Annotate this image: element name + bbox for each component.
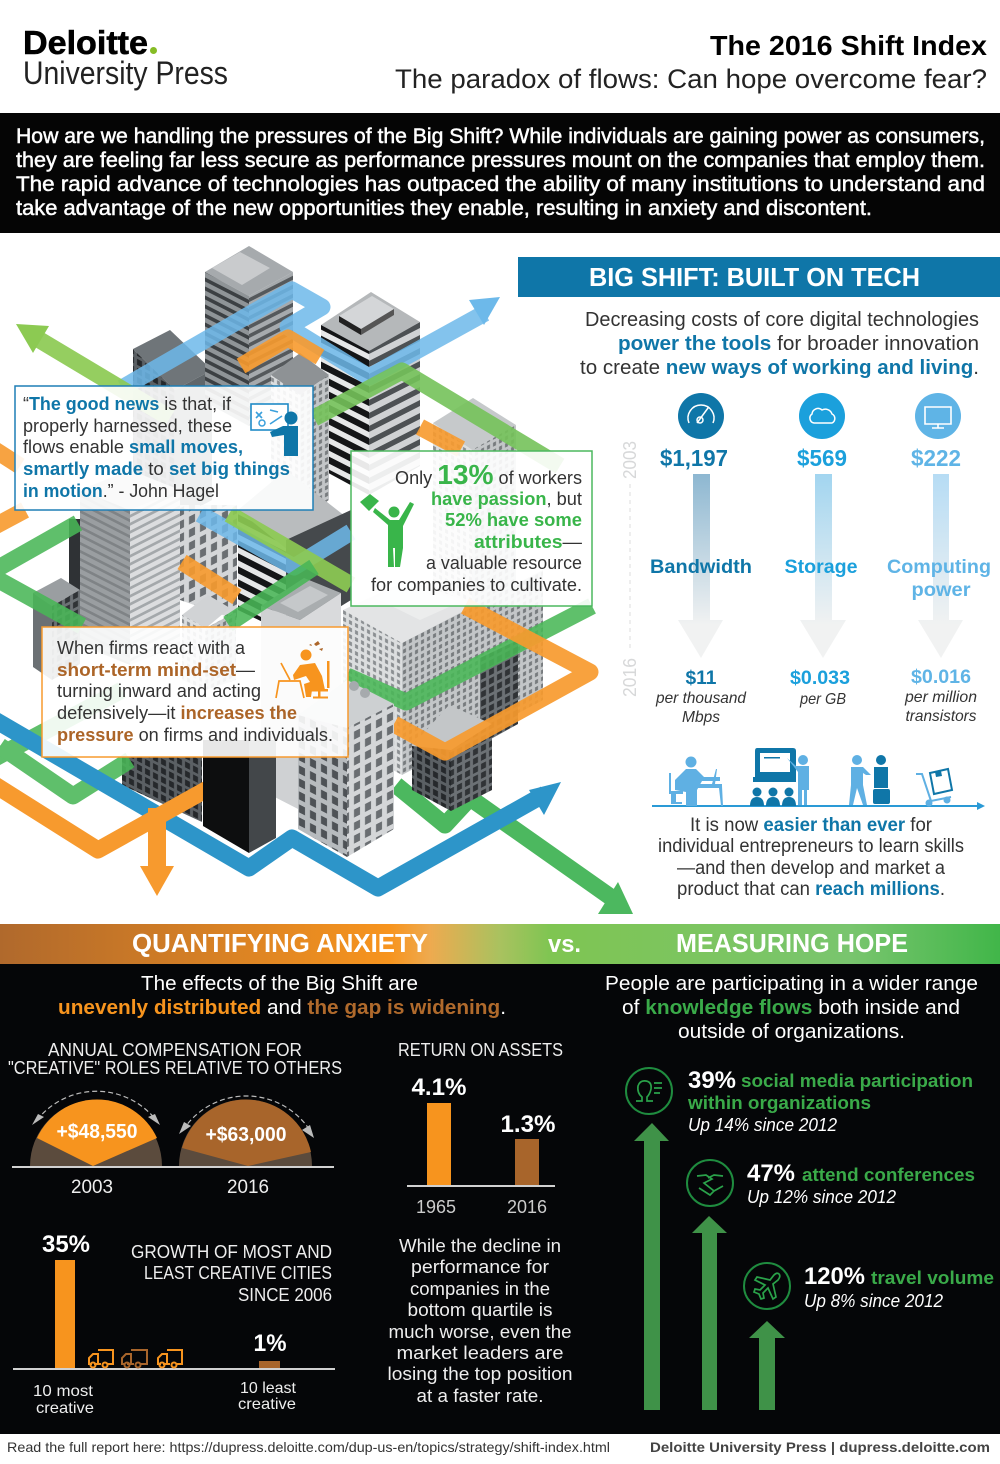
icon: cheering figure with box [360,494,414,567]
stat: social media participation: 39% [688,1067,736,1094]
text: decline in performance: losing the top position [388,1364,572,1384]
callout: John Hagel quote: properly harnessed, these [23,416,232,436]
callout: John Hagel quote: smartly made to set big things [23,459,290,479]
chart: growth of creative cities: SINCE 2006 [238,1285,332,1305]
chart: growth of creative cities: 10 least [240,1380,297,1397]
building: left small [33,578,80,680]
chart: return on assets [398,1040,563,1217]
intro text [580,309,979,379]
entrepreneur text: individual entrepreneurs to learn skills [658,836,964,857]
chart: annual compensation: ANNUAL COMPENSATION FOR [48,1040,302,1060]
anxiety intro text: unevenly distributed and the gap is widening . [58,997,506,1019]
stat: social media participation: social media participation [741,1071,973,1091]
hope intro text: People are participating in a wider range [605,973,978,995]
callout: John Hagel quote: in motion.” - John Hagel [23,481,219,501]
callout: short-term mind-set [42,627,348,757]
building: dark front right [412,705,492,811]
stat: attend conferences: Up 12% since 2012 [747,1187,896,1207]
section heading bar: QUANTIFYING ANXIETY [132,928,428,958]
arrowhead: blue bottom [529,782,561,815]
icons: delivery trucks [89,1350,182,1368]
flow: orange right [394,606,590,752]
intro text: Decreasing costs of core digital technologies [585,309,979,331]
column: bandwidth: Mbps [682,709,720,726]
title: The 2016 Shift Index [710,30,987,61]
stat: social media participation: within organizations [687,1093,871,1113]
arrowhead: top green [16,324,49,353]
callout: short-term mind-set: short-term mind-set — [57,660,255,680]
section heading bar [0,924,1000,964]
flow: top green [33,336,351,585]
text: decline in performance: bottom quartile is [408,1300,552,1320]
column: storage: $569 [797,445,847,471]
chart: return on assets: RETURN ON ASSETS [398,1040,563,1060]
stat: travel volume [744,1263,994,1410]
timeline labels [620,441,640,697]
chart: growth of creative cities: 35% [42,1231,90,1258]
callout: John Hagel quote: flows enable small moves, [23,437,243,457]
callout: short-term mind-set: defensively—it increases the [57,703,297,723]
column: computing power: $0.016 [911,667,971,688]
dark lower panel [0,964,1000,1434]
heading bar: BIG SHIFT: BUILT ON TECH [589,262,920,292]
column: storage: Storage [784,557,858,578]
timeline labels: 2016 [620,658,640,697]
column: computing power: transistors [906,708,976,725]
hope intro text: outside of organizations. [678,1021,905,1043]
text: decline in performance: performance for [411,1257,549,1277]
column: storage [784,393,858,708]
footer: Read the full report here: https://dupress.deloitte.com/dup-us-en/topics/strategy/shift-index.html [7,1439,610,1455]
chart: return on assets: 1965 [416,1197,456,1217]
callout: John Hagel quote: “The good news is that, if [23,394,232,414]
logo: Deloitte University Press: University Press [23,55,228,91]
stat: travel volume: Up 8% since 2012 [804,1291,943,1311]
flow: mid green [0,523,592,796]
icon: stressed worker at laptop [276,641,330,698]
stat: travel volume: travel volume [871,1268,994,1288]
building: left big stripes [69,470,180,665]
callout: workers' passion: 52% have some [445,510,582,530]
stat: social media participation [626,1067,973,1410]
building: central dark [238,470,351,640]
footer: Deloitte University Press | dupress.deloitte.com [650,1439,990,1455]
text: decline in performance: much worse, even the [388,1322,572,1342]
building: tall top [205,246,293,426]
stat: attend conferences: 47% [747,1160,795,1187]
stat: attend conferences [687,1160,975,1410]
flow: orange bottom [0,768,245,850]
chart: growth of creative cities: LEAST CREATIVE CITIES [144,1263,332,1283]
column: computing power: per million [904,689,977,706]
entrepreneur text: —and then develop and market a [677,858,945,879]
chart: growth of creative cities: creative [238,1396,296,1413]
chart: return on assets: 1.3% [500,1111,556,1138]
intro band [0,113,1000,233]
intro text: power the tools for broader innovation [618,333,979,355]
chart: annual compensation: 2003 [71,1177,113,1198]
column: computing power: power [912,580,971,601]
column: bandwidth [650,393,752,726]
column: storage: per GB [799,691,846,708]
text: decline in performance: market leaders are [396,1343,564,1363]
intro band: take advantage of the new opportunities they enable, resulting in anxiety and discontent. [16,197,872,220]
intro band: The rapid advance of technologies has outpaced the ability of many institutions to understand and [16,173,985,196]
building: large right block [343,570,543,775]
timeline labels: 2003 [620,441,640,479]
section heading bar: MEASURING HOPE [676,928,908,958]
chart: annual compensation: "CREATIVE" ROLES RELATIVE TO OTHERS [8,1058,342,1078]
chart: growth of creative cities [13,1231,335,1417]
text: decline in performance: While the decline in [399,1236,561,1256]
building: striped tower [321,292,420,495]
callout: workers' passion: attributes — [474,532,582,552]
text: decline in performance [388,1236,572,1406]
callout: short-term mind-set: pressure on firms and individuals. [57,725,333,745]
chart: annual compensation: +$48,550 [56,1121,138,1143]
callout: workers' passion: for companies to cultivate. [371,575,582,595]
callout: short-term mind-set: turning inward and acting [57,681,261,701]
logo: Deloitte University Press [23,24,228,91]
column: bandwidth: $1,197 [660,445,728,471]
logo: Deloitte University Press: Deloitte [23,24,148,61]
hope intro text [605,973,978,1043]
arrowhead: light blue [469,297,500,325]
illustration: isometric city with flow arrows [0,246,633,914]
column: computing power: Computing [887,557,991,578]
entrepreneur text: It is now easier than ever for [690,815,933,836]
callout: John Hagel quote [15,386,313,510]
chart: annual compensation: 2016 [227,1177,269,1198]
column: computing power: $222 [911,445,961,471]
chart: growth of creative cities: creative [36,1400,94,1417]
anxiety intro text [58,973,506,1019]
stat: social media participation: Up 14% since 2012 [688,1115,837,1135]
flow: blue bottom [0,720,545,888]
building: tall centre [261,578,341,810]
entrepreneur text: product that can reach millions. [677,879,945,900]
building: back dark [133,330,212,520]
building: central windows [180,505,237,690]
entrepreneur text [658,815,964,900]
chart: annual compensation: +$63,000 [206,1124,286,1146]
column: bandwidth: $11 [686,668,717,689]
icons: entrepreneur journey timeline [652,748,985,810]
title [395,30,987,94]
building: black front [203,740,276,853]
column: computing power [887,393,991,725]
chart: annual compensation [8,1040,342,1198]
column: bandwidth: per thousand [655,690,747,707]
chart: return on assets: 2016 [507,1197,547,1217]
building: small white [271,353,329,520]
arrow: orange down [140,808,174,896]
flow: lower right green [396,785,612,898]
building: dark front left [122,757,202,822]
text: decline in performance: at a faster rate. [416,1386,544,1406]
column: bandwidth: Bandwidth [650,557,752,578]
chart: growth of creative cities: 1% [254,1330,286,1357]
flow: orange upper segments [0,338,461,597]
section heading bar: vs. [548,931,581,958]
chart: growth of creative cities: GROWTH OF MOST AND [131,1242,332,1262]
flow: light blue [122,290,485,567]
heading bar [518,257,1000,297]
flow: upper green [314,371,560,466]
arrowhead: lower right green [598,882,633,914]
callout: workers' passion [351,451,592,606]
callout: workers' passion: a valuable resource [426,553,582,573]
title: The paradox of flows: Can hope overcome fear? [395,64,987,94]
intro band: How are we handling the pressures of the Big Shift? While individuals are gaining power as consumers, [16,125,985,148]
icon: presenter at strategy board [251,404,298,456]
chart: growth of creative cities: 10 most [33,1383,94,1400]
text: decline in performance: companies in the [410,1279,550,1299]
stat: attend conferences: attend conferences [802,1165,975,1185]
hope intro text: of knowledge flows both inside and [622,997,960,1019]
building: back right [433,398,516,640]
stat: travel volume: 120% [804,1263,865,1290]
panel: Big Shift built on tech [518,257,1000,900]
chart: return on assets: 4.1% [412,1074,466,1101]
callout: short-term mind-set: When firms react with a [57,638,246,658]
footer [7,1439,990,1455]
anxiety intro text: The effects of the Big Shift are [141,973,418,995]
callout: workers' passion: Only 13% of workers [395,459,582,490]
intro band: they are feeling far less secure as performance pressures mount on the companies that employ them. [16,149,985,172]
intro text: to create new ways of working and living . [580,357,979,379]
column: storage: $0.033 [790,668,850,689]
callout: workers' passion: have passion, but [431,489,582,509]
building: front windows [298,680,394,857]
